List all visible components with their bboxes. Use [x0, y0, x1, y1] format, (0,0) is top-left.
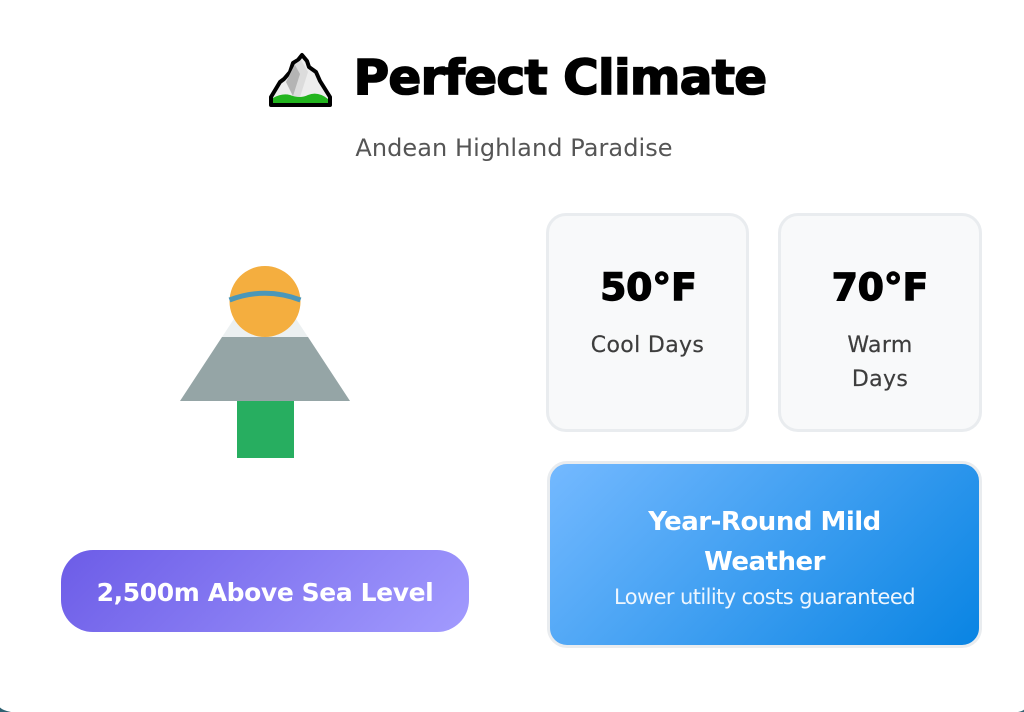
card: year-round weather [547, 461, 982, 648]
title: Perfect Climate [354, 50, 766, 106]
corner: bottom left [0, 708, 11, 712]
card heading [648, 507, 881, 577]
badge: altitude [61, 550, 469, 632]
card: warm days: Warm [847, 333, 913, 358]
corner: bottom right [1018, 710, 1024, 712]
illustration: mountain and sun [180, 266, 350, 458]
card heading: Year-Round Mild [648, 507, 881, 537]
card: cool days [546, 213, 749, 432]
card: warm days: Days [852, 366, 908, 392]
badge text: 2,500m Above Sea Level [97, 578, 433, 607]
card: warm days [778, 213, 982, 432]
card subtext: Lower utility costs guaranteed [614, 584, 915, 608]
card heading: Weather [704, 547, 825, 577]
card: cool days: 50°F [600, 265, 697, 309]
card: cool days: Cool Days [591, 333, 704, 358]
icon: mountain [269, 52, 332, 107]
subtitle: Andean Highland Paradise [355, 134, 673, 162]
card: warm days: 70°F [832, 265, 928, 309]
